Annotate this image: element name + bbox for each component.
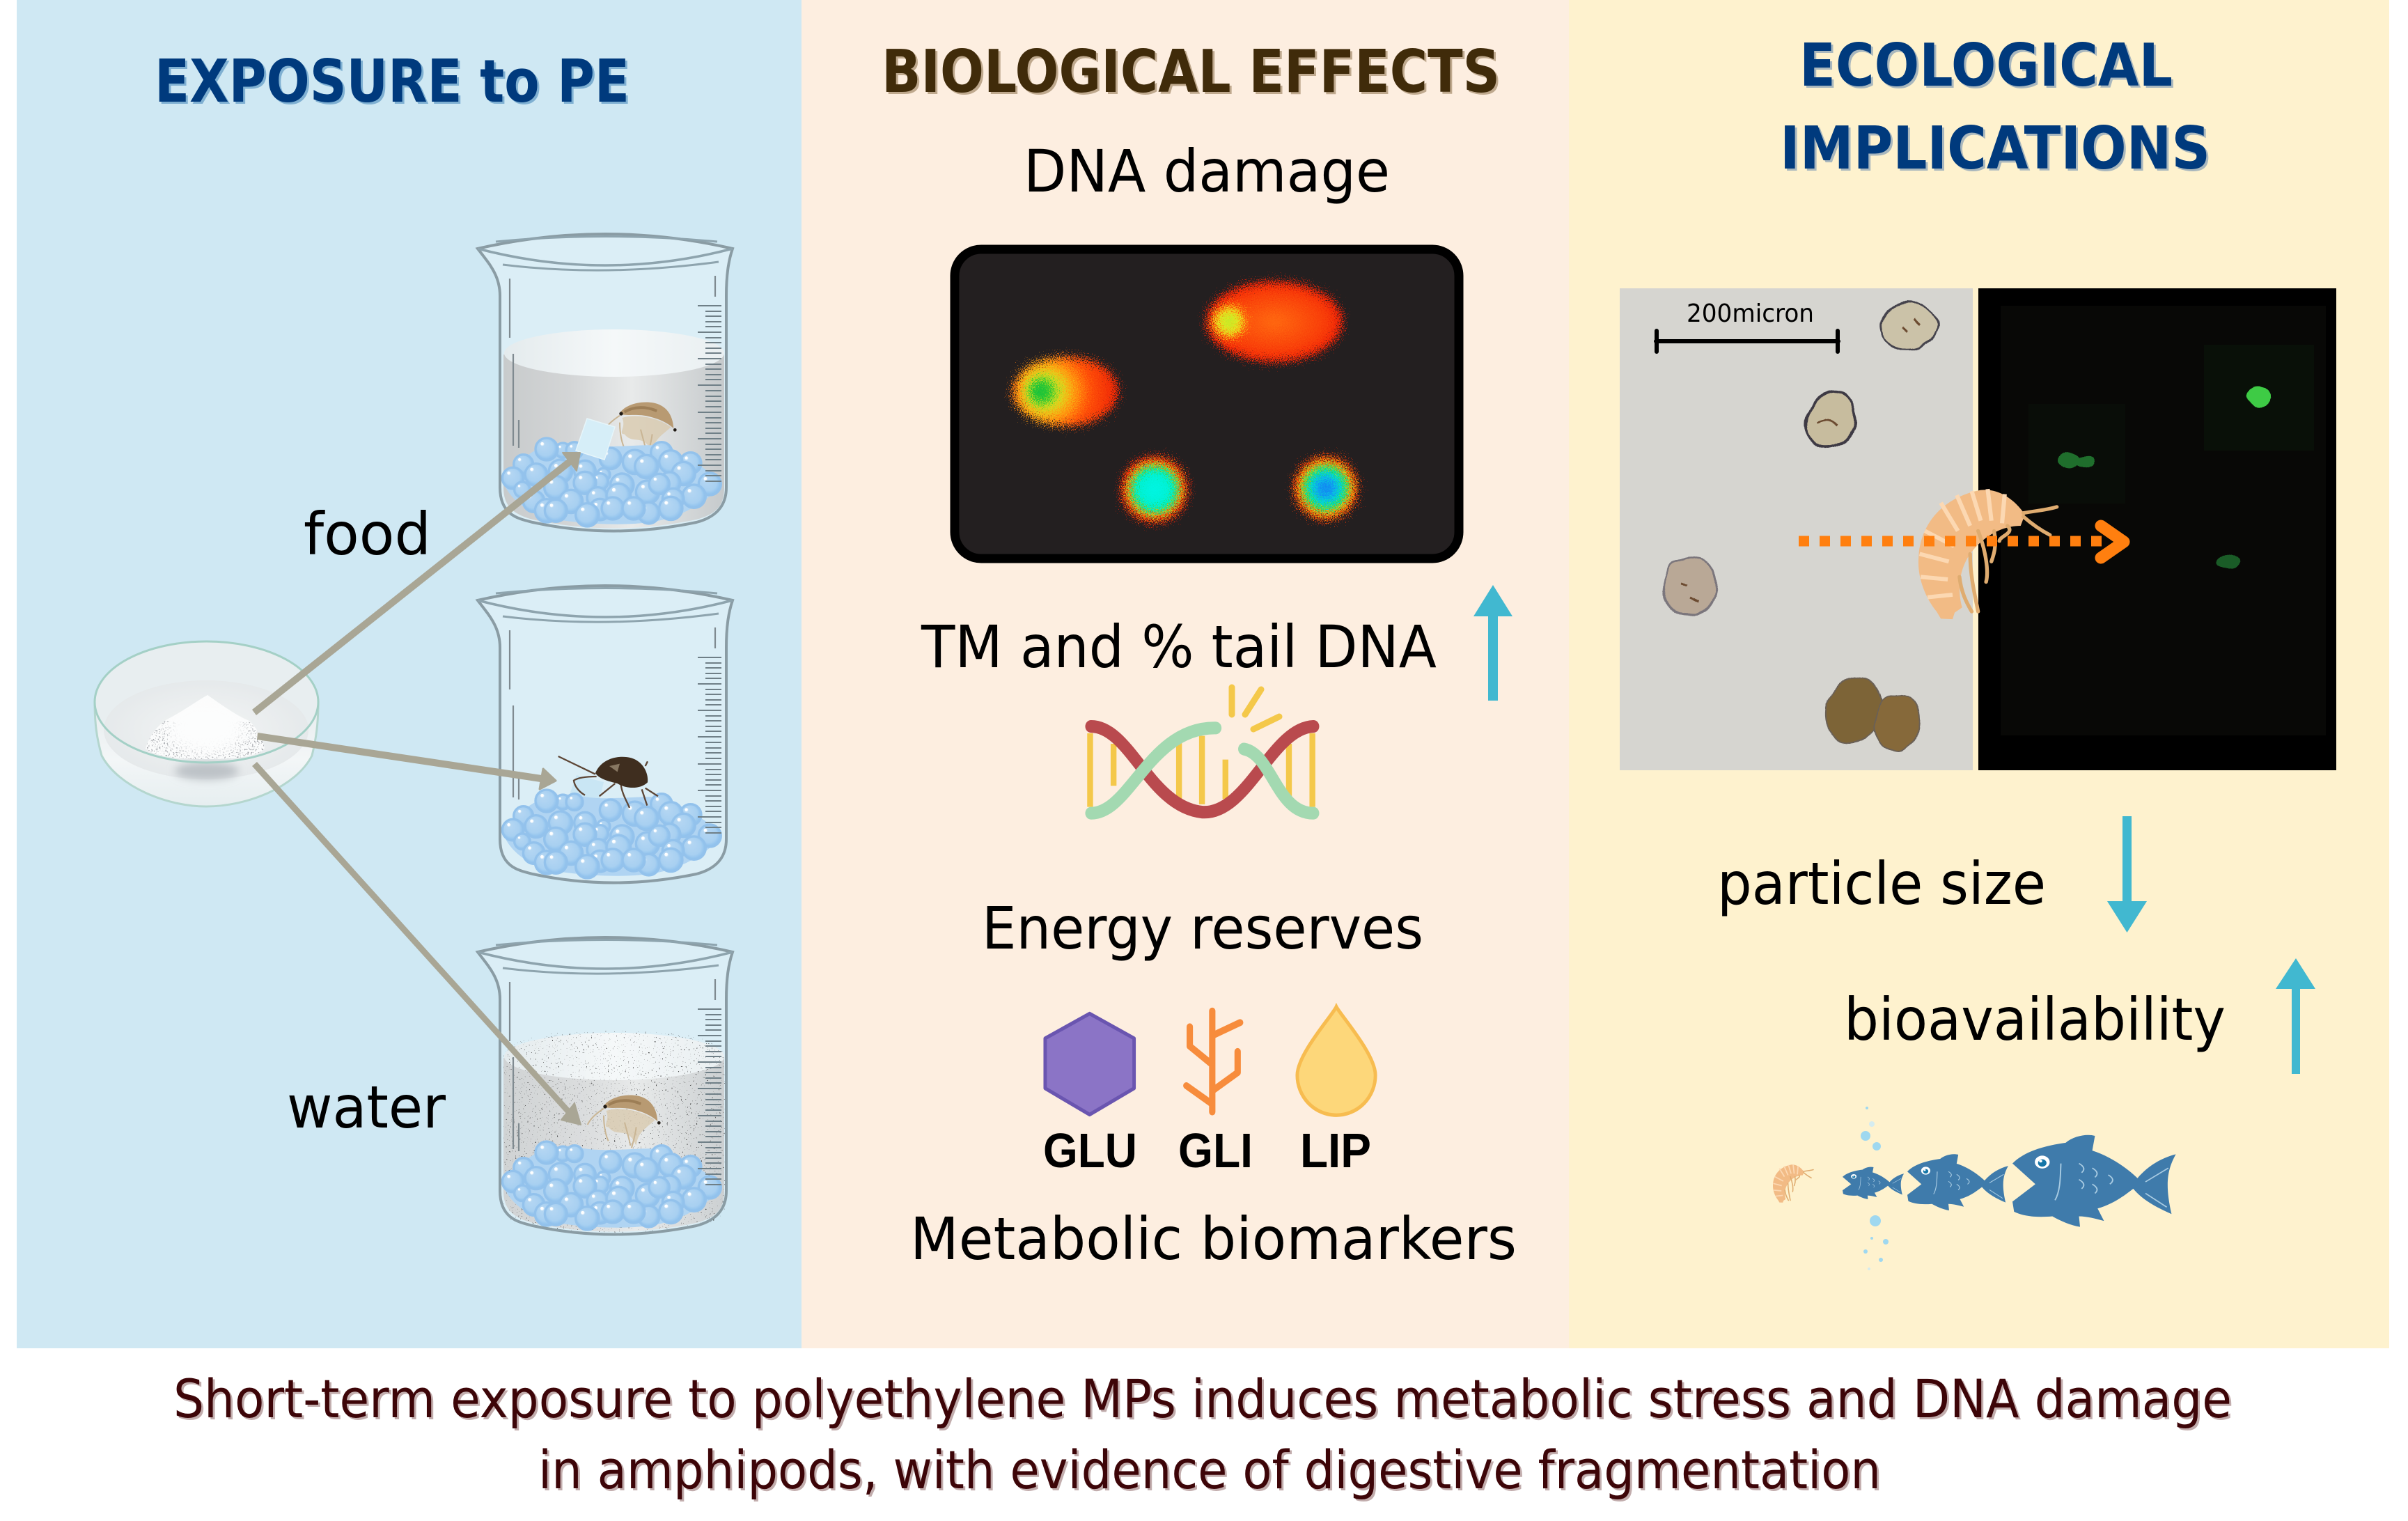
icon: dark amphipod [558, 756, 658, 808]
comet: left [1013, 357, 1118, 426]
conclusion line 2: in amphipods, with evidence of digestive fragmentation [538, 1439, 1881, 1501]
panel: exposure to PE [17, 0, 802, 1348]
comet: top right [1206, 281, 1343, 362]
beaker: water exposure [478, 937, 733, 1234]
photo: fluorescence particles [1978, 288, 2336, 770]
heading: ecological: ECOLOGICAL [1799, 31, 2173, 100]
beaker: food exposure [478, 234, 733, 531]
scale bar label: 200micron [1687, 299, 1814, 328]
arrow: up bioavailability [2276, 958, 2315, 1074]
label: GLU: GLU [1043, 1123, 1137, 1178]
icon: food chain [1773, 1107, 2176, 1270]
icon: food piece [565, 775, 604, 816]
icon: damaged DNA helix [1090, 687, 1313, 813]
icon: lipid drop [1297, 1007, 1375, 1115]
icon: petri dish with powder [95, 641, 318, 806]
icon: medium fish [1907, 1154, 2008, 1210]
icon: amphipod [1918, 489, 2057, 619]
panel: ecological implications [1569, 0, 2389, 1348]
arrow: dish to water beaker [252, 762, 581, 1125]
conclusion line 1: Short-term exposure to polyethylene MPs induces metabolic stress and DNA damage [173, 1368, 2232, 1430]
heading: biological effects: BIOLOGICAL EFFECTS [882, 38, 1500, 107]
label: DNA damage: DNA damage [1024, 137, 1390, 205]
arrow: up TM [1473, 585, 1512, 701]
comet: intact nucleus [1121, 456, 1188, 523]
comet: intact nucleus blue [1294, 456, 1358, 520]
icon: small shrimp [1773, 1164, 1813, 1203]
label: TM and % tail DNA: TM and % tail DNA [921, 613, 1437, 681]
label: LIP: LIP [1300, 1123, 1371, 1178]
icon: glycogen branch [1187, 1011, 1240, 1112]
icon: large fish [2012, 1135, 2176, 1227]
icon: bubbles [1861, 1107, 1889, 1270]
comet assay image [955, 249, 1459, 559]
scale bar [1656, 299, 1838, 352]
photo: brightfield particles [1620, 288, 1973, 770]
conclusion text [173, 1368, 2232, 1501]
icon: small fish [1843, 1167, 1904, 1199]
label: metabolic biomarkers: Metabolic biomarkers [910, 1205, 1517, 1273]
label: GLI: GLI [1178, 1123, 1253, 1178]
icon: food piece [576, 419, 615, 460]
arrow: down particle size [2107, 816, 2147, 933]
label: bioavailability: bioavailability [1844, 985, 2226, 1054]
label: water: water [287, 1073, 446, 1141]
arrow: dish to food beaker [252, 453, 580, 715]
heading: implications: IMPLICATIONS [1780, 114, 2210, 183]
label: food: food [304, 500, 431, 568]
arrow: dish to sediment beaker [257, 733, 556, 789]
icon: glucose hexagon [1045, 1013, 1134, 1114]
arrow: dotted ingestion [1799, 526, 2124, 558]
beaker: sediment exposure [478, 586, 733, 883]
heading: exposure: EXPOSURE to PE [155, 47, 630, 116]
panel: biological effects [802, 0, 1569, 1348]
label: energy reserves: Energy reserves [982, 894, 1423, 962]
label: particle size: particle size [1717, 850, 2046, 918]
